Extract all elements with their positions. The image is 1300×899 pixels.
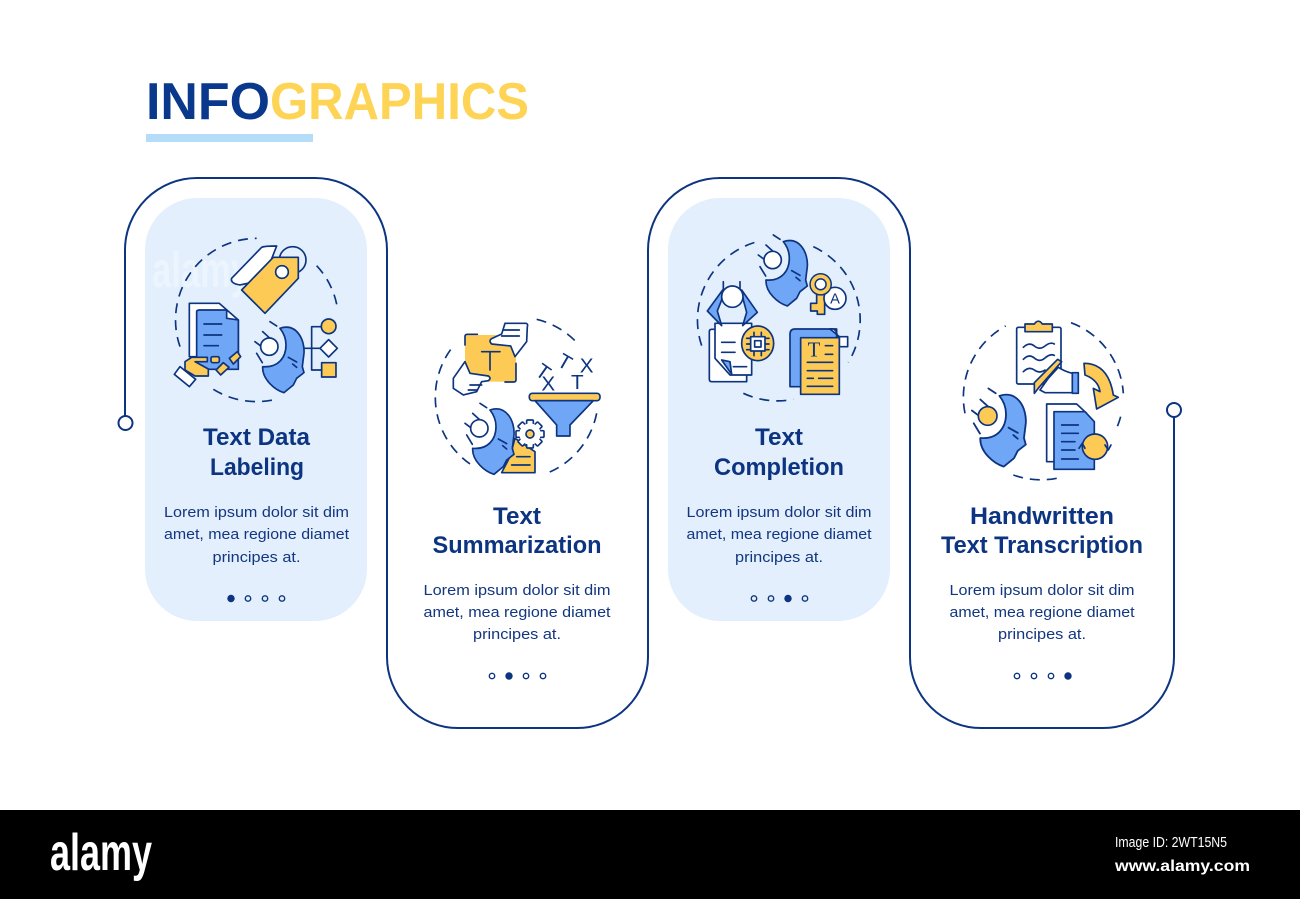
heading: Labeling (210, 454, 304, 481)
body text: principes at. (473, 626, 561, 643)
body text: amet, mea regione diamet (686, 526, 872, 543)
body text: amet, mea regione diamet (950, 604, 1135, 621)
card: Text Completion (686, 424, 872, 602)
body text: amet, mea regione diamet (164, 526, 350, 543)
heading: Handwritten (970, 503, 1114, 530)
heading (203, 424, 311, 481)
timeline start marker (118, 416, 132, 430)
body text: amet, mea regione diamet (424, 604, 611, 621)
card: Text Summarization (424, 503, 611, 679)
heading: Text (755, 424, 803, 451)
body text (164, 504, 350, 566)
icon: text summarization: T (553, 349, 576, 376)
icon: text summarization: X (580, 354, 594, 377)
body text: principes at. (998, 626, 1086, 643)
heading (714, 424, 844, 481)
panel background: Text Data Labeling (145, 198, 367, 621)
heading: Text Transcription (941, 532, 1143, 559)
heading (941, 503, 1143, 559)
icon: text summarization (435, 319, 600, 474)
body text (424, 582, 611, 643)
icon: text summarization: X (541, 373, 555, 396)
icon: handwritten text transcription (963, 321, 1123, 480)
body text (686, 504, 872, 566)
pagination dots (1014, 673, 1071, 679)
heading: Summarization (432, 532, 602, 559)
heading: Text (493, 503, 541, 530)
icon: text data labeling (174, 238, 337, 402)
pagination dots (489, 673, 546, 679)
icon: text completion: A (830, 292, 840, 308)
heading: Text Data (203, 424, 311, 451)
title underline (146, 134, 313, 142)
title: INFO (146, 73, 270, 131)
watermark: alamy (152, 242, 250, 298)
timeline end marker (1167, 403, 1181, 417)
heading (432, 503, 602, 559)
pagination dots (751, 596, 808, 602)
footer image id: Image ID: 2WT15N5 (1115, 834, 1227, 851)
timeline outline (125, 178, 1174, 728)
body text: Lorem ipsum dolor sit dim (686, 504, 872, 521)
body text: principes at. (735, 549, 823, 566)
body text: Lorem ipsum dolor sit dim (424, 582, 610, 599)
icon: text summarization: T (571, 371, 584, 394)
title: GRAPHICS (270, 73, 529, 131)
footer bar (0, 810, 1300, 899)
footer logo: alamy (50, 824, 152, 882)
footer url: www.alamy.com (1114, 858, 1250, 875)
heading: Completion (714, 454, 844, 481)
body text (950, 582, 1135, 643)
card: Handwritten Text Transcription (941, 503, 1143, 679)
card: Text Data Labeling (164, 424, 350, 602)
pagination dots (228, 596, 285, 602)
icon: text completion: T (808, 340, 821, 362)
body text: Lorem ipsum dolor sit dim (164, 504, 349, 521)
panel background: Text Completion (668, 198, 890, 621)
icon: text completion (697, 235, 860, 401)
icon: text summarization: T (531, 359, 555, 386)
body text: Lorem ipsum dolor sit dim (950, 582, 1134, 599)
body text: principes at. (212, 549, 300, 566)
title (146, 73, 529, 131)
